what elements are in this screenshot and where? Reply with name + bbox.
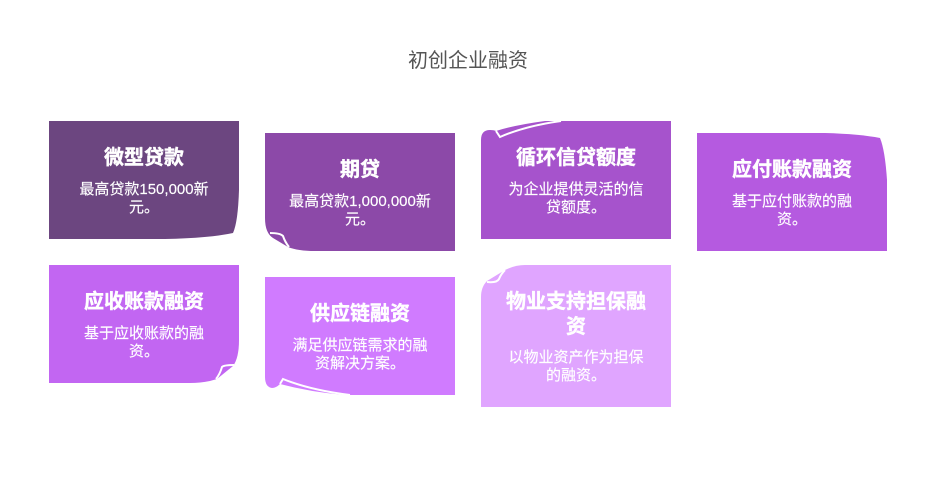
description	[289, 193, 431, 228]
description: 为企业提供灵活的信	[508, 181, 644, 198]
description: 满足供应链需求的融	[292, 337, 428, 354]
heading	[506, 290, 646, 338]
card shape: top-left page curl	[481, 121, 671, 239]
card shape: top-right curved corner	[697, 133, 887, 251]
description: 基于应收账款的融	[84, 325, 204, 342]
card shape: top-left page curl	[481, 265, 671, 407]
description: 资。	[777, 211, 807, 228]
description	[84, 325, 204, 360]
panel: 应收账款融资	[49, 265, 239, 383]
description: 贷额度。	[546, 199, 606, 216]
panel: 期贷	[265, 133, 455, 251]
card shape: bottom-right page curl	[49, 265, 239, 383]
description: 元。	[129, 199, 159, 216]
description	[292, 337, 428, 372]
card shape: bottom-left page curl	[265, 133, 455, 251]
description: 最高贷款150,000新	[79, 181, 209, 198]
description	[508, 349, 644, 384]
description: 最高贷款1,000,000新	[289, 193, 431, 210]
panel: 应付账款融资	[697, 133, 887, 251]
panel: 微型贷款	[49, 121, 239, 239]
description	[732, 193, 852, 228]
title: 初创企业融资	[408, 50, 528, 72]
panel: 物业支持担保融资	[481, 265, 671, 407]
description: 元。	[345, 211, 375, 228]
description: 资解决方案。	[315, 355, 405, 372]
card shape: bottom-left page curl	[265, 277, 455, 395]
description: 资。	[129, 343, 159, 360]
description: 以物业资产作为担保	[508, 349, 644, 366]
heading: 微型贷款	[104, 147, 184, 169]
heading: 期贷	[340, 159, 380, 181]
card shape: bottom-right curved corner	[49, 121, 239, 239]
heading: 循环信贷额度	[516, 147, 636, 169]
description: 基于应付账款的融	[732, 193, 852, 210]
heading: 物业支持担保融	[506, 291, 646, 313]
description	[79, 181, 209, 216]
heading: 应收账款融资	[84, 291, 204, 313]
description	[508, 181, 644, 216]
panel: 供应链融资	[265, 277, 455, 395]
description: 的融资。	[546, 367, 606, 384]
heading: 应付账款融资	[732, 159, 852, 181]
heading: 供应链融资	[310, 303, 410, 325]
heading: 资	[566, 316, 586, 338]
panel: 循环信贷额度	[481, 121, 671, 239]
